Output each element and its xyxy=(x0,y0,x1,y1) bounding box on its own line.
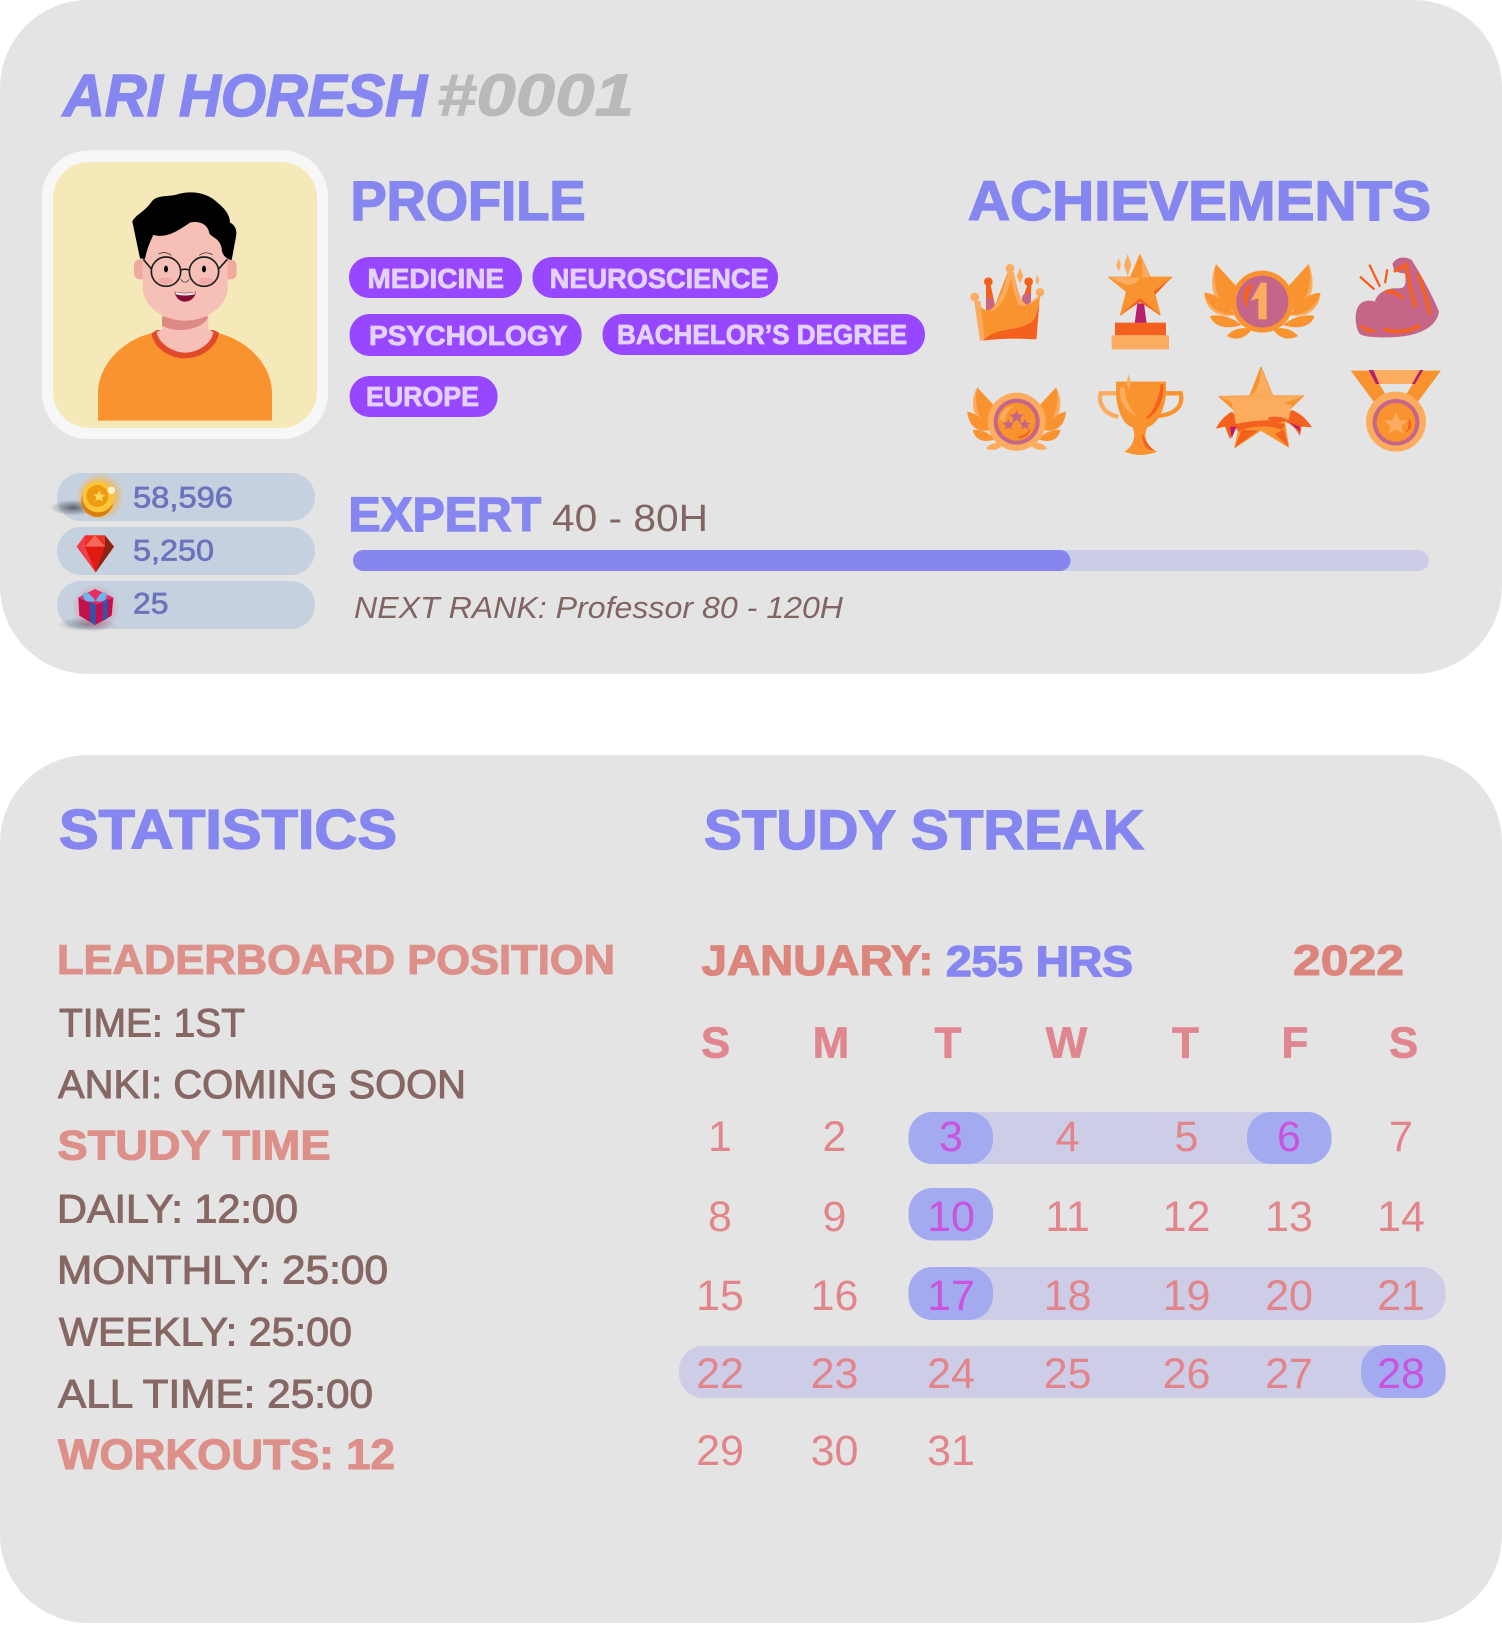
calendar dates: 16 xyxy=(811,1272,858,1320)
panel: profile card xyxy=(0,0,1502,674)
calendar dates: 7 xyxy=(1389,1113,1413,1161)
calendar weekday header: S xyxy=(701,1019,730,1068)
stat: gifts xyxy=(57,581,315,632)
rank hours: 40 - 80H xyxy=(552,498,708,540)
calendar dates: 8 xyxy=(708,1193,732,1241)
year: 2022 xyxy=(1293,937,1404,985)
calendar dates: 2 xyxy=(823,1113,846,1161)
calendar dates: 12 xyxy=(1163,1193,1210,1241)
calendar weekday header: W xyxy=(1046,1019,1088,1068)
heading: achievements: ACHIEVEMENTS xyxy=(968,169,1431,232)
calendar weekday header xyxy=(701,1019,1418,1068)
monthly time: MONTHLY: 25:00 xyxy=(57,1249,388,1293)
statistics list xyxy=(57,936,615,1479)
calendar weekday header: T xyxy=(935,1019,962,1068)
calendar dates: 20 xyxy=(1265,1272,1313,1320)
anki rank: ANKI: COMING SOON xyxy=(58,1063,466,1107)
stat: gems xyxy=(57,527,315,575)
calendar weekday header: T xyxy=(1172,1019,1199,1068)
tag: psychology xyxy=(350,314,582,356)
study time heading: STUDY TIME xyxy=(58,1122,330,1169)
gem count: 5,250 xyxy=(133,534,214,568)
calendar dates: 13 xyxy=(1265,1193,1313,1241)
all time: ALL TIME: 25:00 xyxy=(58,1373,373,1417)
icon: flexed muscle xyxy=(1356,258,1439,337)
calendar dates: 14 xyxy=(1377,1193,1425,1241)
progress bar xyxy=(353,550,1429,571)
calendar dates: 6 xyxy=(1277,1113,1301,1161)
calendar dates: 18 xyxy=(1044,1272,1092,1320)
calendar dates: 27 xyxy=(1265,1350,1313,1398)
gift count: 25 xyxy=(133,588,168,620)
calendar dates: 10 xyxy=(927,1193,975,1241)
weekly time: WEEKLY: 25:00 xyxy=(59,1311,352,1355)
workouts: WORKOUTS: 12 xyxy=(58,1431,395,1479)
icon: trophy cup xyxy=(1100,374,1181,455)
next rank note: NEXT RANK: Professor 80 - 120H xyxy=(354,590,844,625)
calendar dates: 25 xyxy=(1044,1350,1092,1398)
calendar dates: 22 xyxy=(696,1350,744,1398)
stat: coins xyxy=(50,473,315,521)
avatar card xyxy=(42,150,328,439)
coin count: 58,596 xyxy=(133,482,233,514)
calendar dates: 28 xyxy=(1377,1350,1425,1398)
achievement icons xyxy=(967,254,1441,455)
calendar dates: 29 xyxy=(696,1427,744,1475)
calendar dates: 4 xyxy=(1056,1113,1080,1161)
tag: psychology: PSYCHOLOGY xyxy=(369,320,568,351)
heading: study streak: STUDY STREAK xyxy=(704,798,1144,861)
daily time: DAILY: 12:00 xyxy=(57,1188,298,1232)
calendar weekday header: M xyxy=(813,1019,849,1068)
calendar dates: 24 xyxy=(927,1350,975,1398)
calendar dates: 11 xyxy=(1045,1193,1090,1241)
calendar dates: 23 xyxy=(811,1350,858,1398)
rank label: expert: EXPERT xyxy=(348,489,541,542)
calendar dates: 9 xyxy=(823,1193,846,1241)
avatar portrait xyxy=(98,192,272,421)
month label: JANUARY: xyxy=(702,937,934,985)
panel: statistics and streak card xyxy=(0,755,1502,1623)
heading: profile: PROFILE xyxy=(350,169,586,232)
tag: neuroscience: NEUROSCIENCE xyxy=(550,263,769,294)
tag: bachelor's degree: BACHELOR’S DEGREE xyxy=(617,319,907,350)
icon: three-star laurel badge xyxy=(967,387,1066,451)
calendar dates: 30 xyxy=(811,1427,858,1475)
tag: medicine xyxy=(349,257,522,298)
calendar dates: 5 xyxy=(1175,1113,1198,1161)
calendar dates: 26 xyxy=(1163,1350,1210,1398)
tag: medicine: MEDICINE xyxy=(368,263,504,294)
icon: medal xyxy=(1351,370,1441,452)
calendar dates xyxy=(696,1113,1425,1475)
title: name: ARI HORESH xyxy=(61,63,428,129)
calendar dates: 21 xyxy=(1377,1272,1425,1320)
tag: europe: EUROPE xyxy=(366,381,479,412)
icon: crown xyxy=(970,264,1044,341)
calendar weekday header: F xyxy=(1282,1019,1308,1068)
calendar dates: 19 xyxy=(1163,1272,1210,1320)
calendar dates: 31 xyxy=(927,1427,975,1475)
title: user number: #0001 xyxy=(437,62,634,128)
leaderboard heading: LEADERBOARD POSITION xyxy=(57,936,615,983)
icon: star with ribbon xyxy=(1216,367,1312,447)
calendar dates: 3 xyxy=(939,1113,963,1161)
calendar dates: 1 xyxy=(708,1113,732,1161)
calendar streak highlights xyxy=(679,1112,1446,1398)
icon: number one laurel badge xyxy=(1204,264,1320,339)
calendar weekday header: S xyxy=(1389,1019,1418,1068)
calendar dates: 15 xyxy=(696,1272,744,1320)
tag: europe xyxy=(350,376,498,417)
icon: star trophy xyxy=(1109,254,1172,349)
tag: neuroscience xyxy=(532,257,778,298)
time rank: TIME: 1ST xyxy=(59,1002,245,1046)
heading: statistics: STATISTICS xyxy=(59,798,397,860)
calendar dates: 17 xyxy=(927,1272,975,1320)
monthly hours: 255 HRS xyxy=(946,938,1133,986)
